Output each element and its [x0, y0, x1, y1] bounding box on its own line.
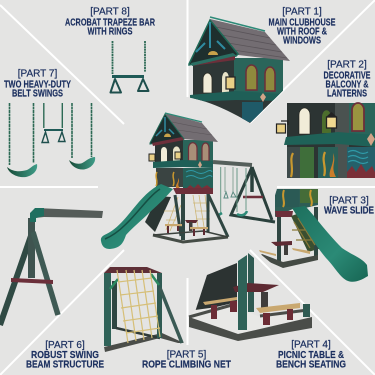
- heading: part 5: [142, 350, 231, 370]
- swings and rings: [217, 167, 247, 216]
- heading: part 6: [26, 340, 104, 370]
- heading: part 4: [PART 4]: [291, 340, 331, 350]
- panel: part 8 trapeze: [65, 6, 156, 92]
- bracket: [30, 208, 44, 222]
- corner braces: [110, 274, 159, 289]
- beam: [35, 208, 103, 218]
- diamond ornament: [367, 133, 375, 146]
- lower tower wall: [156, 168, 213, 194]
- heading: part 6: BEAM STRUCTURE: [26, 360, 104, 370]
- heading: part 8: ACROBAT TRAPEZE BAR: [65, 17, 156, 28]
- upper tower: [153, 140, 213, 168]
- base: [258, 254, 318, 268]
- center post: [28, 218, 35, 278]
- panel: part 4 picnic crop: [189, 253, 312, 341]
- heading: part 8: [PART 8]: [90, 6, 130, 18]
- clubhouse roof: [210, 19, 290, 61]
- tower roof: [150, 113, 218, 146]
- panel: part 6 swing beam: [0, 208, 103, 325]
- heading: part 4: [276, 340, 346, 370]
- left post: [104, 273, 111, 346]
- clubhouse balcony band: [190, 91, 283, 102]
- heading: part 1: WINDOWS: [283, 36, 321, 46]
- posts: [248, 253, 254, 312]
- heading: part 7: [4, 68, 71, 100]
- right post and brace: [157, 273, 182, 343]
- net backing: [291, 214, 319, 252]
- base rails: [104, 333, 184, 352]
- main playset: [101, 113, 275, 249]
- heading: part 8: WITH RINGS: [88, 26, 133, 37]
- clubhouse gable: [189, 20, 238, 65]
- lantern left: [276, 121, 288, 133]
- legs and base: [153, 194, 228, 242]
- window: framed: [352, 103, 364, 131]
- panel: part 2 balcony crop: [276, 103, 375, 178]
- heading: part 6: ROBUST SWING: [31, 350, 99, 361]
- heading: part 2: [324, 60, 371, 100]
- panel: part 1 clubhouse crop: [189, 17, 290, 128]
- clubhouse walls: [193, 58, 283, 128]
- heading: part 1: WITH ROOF &: [277, 26, 327, 38]
- clubhouse framed windows: [246, 65, 257, 90]
- heading: part 8: [65, 6, 156, 37]
- panel behind slide: [145, 196, 171, 232]
- heading: part 6: [PART 6]: [45, 340, 85, 351]
- post front: [238, 255, 247, 330]
- balcony band: [284, 132, 375, 147]
- heading: part 1: [PART 1]: [282, 6, 322, 18]
- heading: part 5: [PART 5]: [167, 350, 206, 360]
- cross bar: [11, 278, 53, 284]
- window: green view: [322, 110, 331, 133]
- icon: trapeze bar with rings: [110, 41, 148, 92]
- top beam: [104, 267, 162, 273]
- panel: part 5 rope net: [104, 267, 184, 352]
- icon: belt swing right: [69, 103, 95, 170]
- lanterns: [149, 152, 181, 161]
- heading: part 3: [PART 3]: [329, 196, 369, 206]
- table and benches: [165, 220, 208, 236]
- swing frame: [213, 162, 275, 222]
- flame ornament: [330, 153, 336, 177]
- lantern: [226, 77, 235, 89]
- frame: [189, 305, 312, 341]
- benches: [203, 297, 237, 305]
- table: [233, 283, 279, 292]
- heading: part 4: PICNIC TABLE &: [278, 350, 344, 361]
- back post: [112, 281, 117, 329]
- panel: part 7 swings: [4, 68, 95, 177]
- icon: belt swing left: [7, 103, 37, 177]
- heading: part 1: MAIN CLUBHOUSE: [268, 17, 336, 28]
- heading: part 1: [268, 6, 336, 46]
- clubhouse open windows: [203, 73, 212, 93]
- heading: part 7: TWO HEAVY-DUTY: [4, 80, 71, 90]
- heading: part 2: [PART 2]: [327, 60, 367, 70]
- back panel: [195, 263, 237, 312]
- heading: part 3: [324, 196, 374, 216]
- heading: part 7: BELT SWINGS: [12, 88, 63, 100]
- climbing nets: [164, 195, 210, 231]
- left leg: [0, 233, 32, 325]
- rope net: [117, 270, 160, 343]
- net: [292, 218, 315, 248]
- table: [271, 241, 292, 246]
- tower base crop: [275, 189, 318, 217]
- legs: [279, 207, 316, 263]
- right leg: [33, 232, 58, 315]
- lantern right: [326, 112, 337, 128]
- clubhouse wave panel: [242, 102, 263, 122]
- icon: small trapeze: [42, 103, 65, 142]
- wave slide: [101, 184, 173, 249]
- window: arched white: [299, 108, 310, 134]
- heading: part 4: BENCH SEATING: [276, 360, 346, 370]
- wave slide large: [292, 206, 368, 282]
- heading: part 5: ROPE CLIMBING NET: [142, 360, 231, 370]
- gold scroll ornaments: [291, 152, 325, 177]
- panel: part 3 slide crop: [258, 189, 368, 282]
- heading: part 7: [PART 7]: [18, 68, 57, 80]
